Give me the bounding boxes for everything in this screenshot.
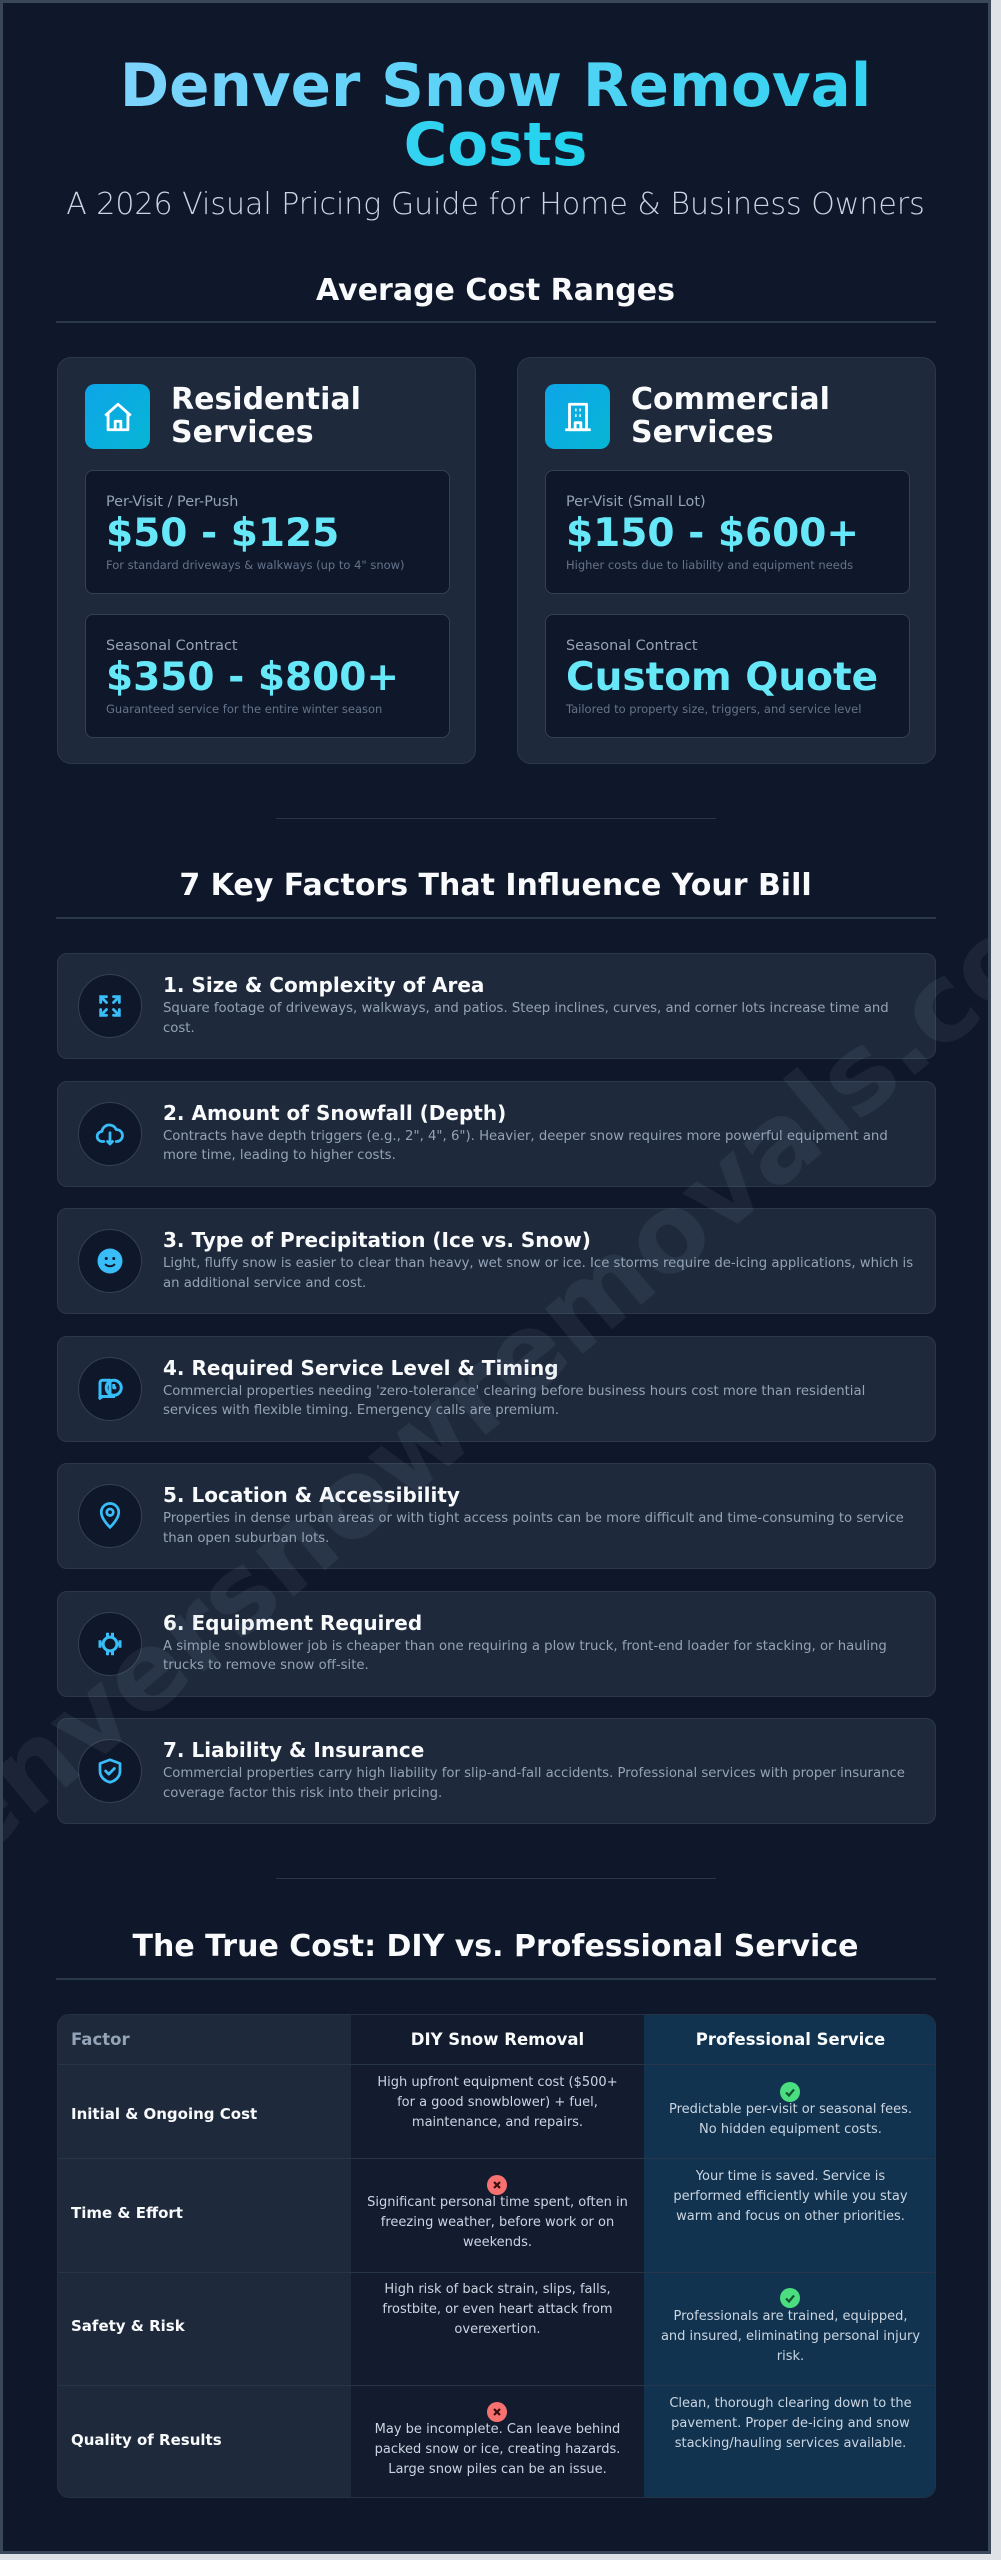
factor 3: Light, fluffy snow is easier to clear than heavy, wet snow or ice. Ice storms require de-icing applications, which is [163,1256,913,1271]
comparison table: weekends. [463,2235,532,2250]
price box: per-visit: Per-Visit / Per-Push [106,494,238,510]
icon: engine [78,1612,142,1676]
comparison table: and insured, eliminating personal injury [661,2329,920,2344]
comparison table: overexertion. [454,2322,541,2337]
factor 3 [57,1208,936,1314]
comparison table [57,2014,936,2498]
comparison table: DIY Snow Removal [411,2030,584,2049]
row: safety: Safety & Risk [71,2317,185,2335]
heading: commercial: Commercial [631,382,830,417]
header row: Factor [71,2030,130,2049]
comparison table: for a good snowblower) + fuel, [397,2095,598,2110]
price box: per-visit: Per-Visit (Small Lot) [566,494,706,510]
price box: seasonal [545,614,910,738]
factor 3: 3. Type of Precipitation (Ice vs. Snow) [163,1228,591,1252]
factor 3: an additional service and cost. [163,1276,366,1290]
price box: seasonal [85,614,450,738]
comparison table: packed snow or ice, creating hazards. [375,2442,620,2457]
icon: cloud [78,1102,142,1166]
factor 1: Square footage of driveways, walkways, and patios. Steep inclines, curves, and corner lots increase time and [163,1001,889,1016]
icon: shield check [78,1739,142,1803]
comparison table: risk. [777,2349,804,2364]
price box: seasonal: Guaranteed service for the entire winter season [106,702,382,716]
factor 1: 1. Size & Complexity of Area [163,973,484,997]
comparison table: May be incomplete. Can leave behind [375,2422,620,2437]
icon: expand [78,974,142,1038]
heading: residential [171,382,361,450]
row: quality: Quality of Results [71,2431,222,2449]
comparison table: freezing weather, before work or on [381,2215,614,2230]
comparison table: pavement. Proper de-icing and snow [671,2416,910,2431]
factor 7: Commercial properties carry high liability for slip-and-fall accidents. Professional services with proper insurance [163,1766,905,1781]
factor 5 [57,1463,936,1569]
comparison table: High upfront equipment cost ($500+ [377,2075,618,2090]
factor 6: trucks to remove snow off-site. [163,1658,369,1673]
factor 5: than open suburban lots. [163,1530,329,1546]
factor 1: cost. [163,1020,195,1036]
comparison table: Predictable per-visit or seasonal fees. [669,2102,912,2117]
heading: residential: Residential [171,382,361,417]
comparison table: No hidden equipment costs. [699,2122,882,2137]
factor 6 [57,1590,936,1696]
factor 2: more time, leading to higher costs. [163,1148,396,1163]
factor 2 [57,1080,936,1186]
factor 2: 2. Amount of Snowfall (Depth) [163,1100,506,1124]
factor 2: Contracts have depth triggers (e.g., 2", 4", 6"). Heavier, deeper snow requires more powerful equipment and [163,1128,888,1144]
icon: face [78,1229,142,1293]
price box: per-visit: For standard driveways & walkways (up to 4" snow) [106,558,405,572]
factor 1 [57,953,936,1059]
heading: key factors: 7 Key Factors That Influence Your Bill [179,868,812,903]
row: initial cost: Initial & Ongoing Cost [71,2105,257,2123]
factor 7 [57,1718,936,1824]
title: Costs [404,111,587,180]
heading: DIY vs pro: The True Cost: DIY vs. Professional Service [133,1929,858,1964]
price box: seasonal: $350 - $800+ [106,655,399,700]
factor 7: 7. Liability & Insurance [163,1738,424,1762]
comparison table: Large snow piles can be an issue. [388,2462,607,2477]
heading: average cost ranges: Average Cost Ranges [316,273,675,308]
factor 4: 4. Required Service Level & Timing [163,1356,559,1380]
price box: seasonal: Seasonal Contract [566,638,698,654]
icon: house [85,384,150,449]
icon: truck clock [78,1356,142,1420]
comparison table: stacking/hauling services available. [675,2436,906,2451]
panel: residential services [57,357,476,764]
factor 6: A simple snowblower job is cheaper than one requiring a plow truck, front-end loader for stacking, or hauling [163,1638,887,1654]
panel: commercial services [517,357,936,764]
comparison table: maintenance, and repairs. [412,2115,583,2130]
factor 4 [57,1336,936,1442]
comparison table: Professional Service [696,2030,885,2049]
price box: seasonal: Tailored to property size, triggers, and service level [566,702,861,716]
price box: per-visit: Higher costs due to liability and equipment needs [566,558,853,572]
comparison table: Your time is saved. Service is [696,2169,885,2184]
comparison table: High risk of back strain, slips, falls, [384,2282,611,2297]
heading: commercial [631,382,830,450]
title [120,52,871,180]
icon: building [545,384,610,449]
factor 7: coverage factor this risk into their pricing. [163,1786,442,1800]
comparison table: Professionals are trained, equipped, [674,2309,907,2324]
row: time: Time & Effort [71,2204,183,2222]
factor 4: services with flexible timing. Emergency calls are premium. [163,1403,559,1418]
comparison table: Significant personal time spent, often in [367,2195,628,2210]
price box: per-visit [545,470,910,594]
price box: per-visit: $150 - $600+ [566,511,859,556]
factor 5: 5. Location & Accessibility [163,1483,460,1507]
title: Denver Snow Removal [120,52,871,121]
comparison table: performed efficiently while you stay [673,2189,908,2204]
icon: map pin [78,1484,142,1548]
price box: per-visit: $50 - $125 [106,511,339,556]
heading: commercial: Services [631,415,774,450]
comparison table: frostbite, or even heart attack from [382,2302,613,2317]
price box: per-visit [85,470,450,594]
subtitle: A 2026 Visual Pricing Guide for Home & Business Owners [66,187,925,222]
comparison table: Clean, thorough clearing down to the [669,2396,912,2411]
price box: seasonal: Seasonal Contract [106,638,238,654]
heading: residential: Services [171,415,314,450]
comparison table: warm and focus on other priorities. [676,2209,905,2224]
factor 4: Commercial properties needing 'zero-tolerance' clearing before business hours cost more than residential [163,1384,865,1398]
price box: seasonal: Custom Quote [566,655,878,700]
factor 5: Properties in dense urban areas or with tight access points can be more difficult and time-consuming to service [163,1511,904,1526]
factor 6: 6. Equipment Required [163,1610,422,1634]
